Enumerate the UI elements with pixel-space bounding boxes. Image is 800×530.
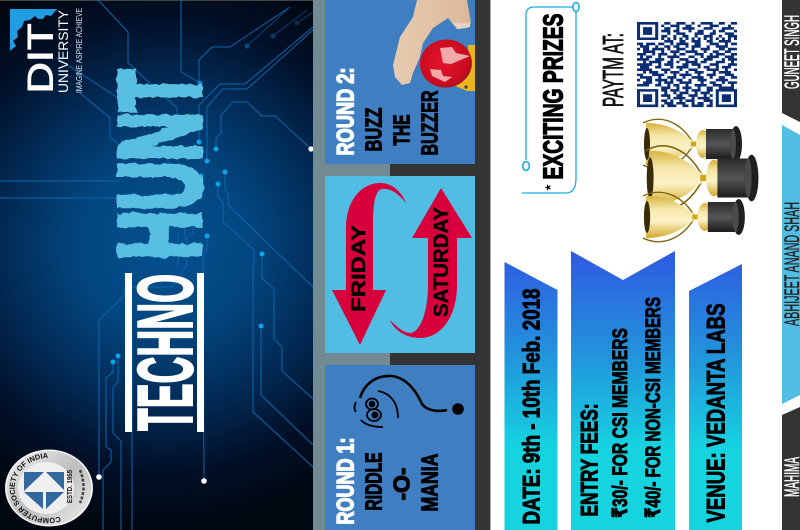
panel: round 1 riddle-o-mania: RIDDLE xyxy=(360,452,386,510)
panel: round 1 riddle-o-mania: ROUND 1: xyxy=(332,438,360,524)
panel: entry fees ribbon: ENTRY FEES: xyxy=(576,404,604,516)
panel: round 1 riddle-o-mania: -O- xyxy=(388,468,414,500)
icon: DIT University logo: UNIVERSITY xyxy=(55,9,71,93)
panel: round 2 buzz the buzzer: BUZZ xyxy=(360,108,386,152)
icon: DIT University logo: DIT xyxy=(22,24,60,94)
icon: hand over red buzzer xyxy=(393,0,475,91)
icon: QR code xyxy=(637,23,737,106)
text: TECHNO xyxy=(121,274,209,431)
arrow: friday down: FRIDAY xyxy=(349,225,370,312)
panel: round 2 buzz the buzzer: ROUND 2: xyxy=(332,68,360,156)
icon: Computer Society of India seal: ESTD. 1965 xyxy=(67,470,74,503)
panel: date ribbon: DATE: 9th - 10th Feb. 2018 xyxy=(518,288,546,524)
panel: date ribbon xyxy=(504,262,558,530)
panel: organiser tab abhijeet anand shah xyxy=(781,125,800,404)
icon: DIT University logo xyxy=(10,8,84,94)
panel: round 1 riddle-o-mania: MANIA xyxy=(416,454,442,512)
panel: centre column backing xyxy=(313,0,491,530)
panel: organiser tab mahima xyxy=(781,407,800,530)
panel: friday saturday arrows xyxy=(325,176,475,353)
arrow: friday down xyxy=(332,183,406,345)
icon: Computer Society of India seal xyxy=(5,450,93,526)
panel: entry fees ribbon: ₹40/- FOR NON-CSI MEMBERS xyxy=(642,297,665,518)
title: TECHNO xyxy=(121,273,209,432)
panel: entry fees ribbon xyxy=(571,251,675,530)
panel: round 2 buzz the buzzer xyxy=(325,0,475,164)
icon: Computer Society of India seal: COMPUTER SOCIETY OF INDIA xyxy=(10,453,60,524)
panel: round 2 buzz the buzzer: THE xyxy=(388,114,414,146)
panel: round 1 riddle-o-mania xyxy=(325,365,475,530)
white junction dots xyxy=(96,146,314,484)
panel: round 2 buzz the buzzer: BUZZER xyxy=(416,90,442,156)
callout: exciting prizes xyxy=(522,2,579,193)
circuit dots xyxy=(110,20,300,364)
panel: venue ribbon: VENUE: VEDANTA LABS xyxy=(702,304,730,522)
callout: exciting prizes: ★ xyxy=(544,183,554,192)
arrow: saturday up xyxy=(390,188,472,338)
panel: entry fees ribbon: ₹30/- FOR CSI MEMBERS xyxy=(609,328,632,518)
arrow: saturday up: SATURDAY xyxy=(430,207,453,317)
icon: question mark face xyxy=(354,376,464,427)
panel: techno hunt poster background xyxy=(0,0,314,530)
panel: venue ribbon xyxy=(689,264,742,530)
icon: three golden trophies xyxy=(643,119,758,242)
